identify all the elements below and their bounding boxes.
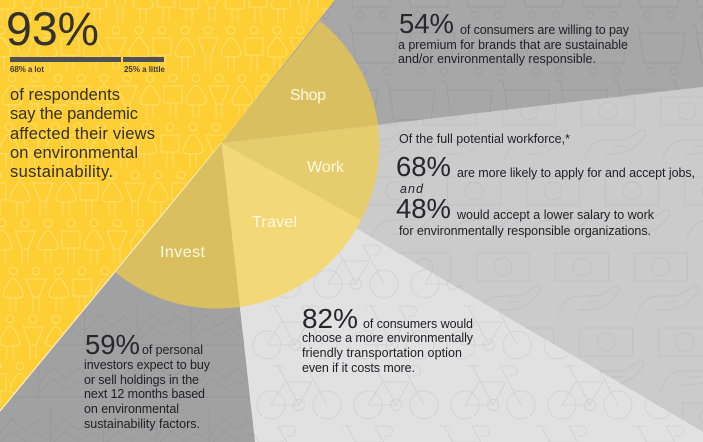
text block: invest statistic: sustainability factors.	[84, 417, 200, 431]
text block: invest statistic: on environmental	[84, 402, 179, 416]
text: respondents statement: affected their views	[10, 125, 155, 143]
text block: work statistics	[396, 132, 695, 238]
bar label: 25% a little: 25% a little	[124, 65, 166, 74]
panel: invest background with line chart pattern	[0, 145, 255, 442]
text block: shop statistic: and/or environmentally responsible.	[398, 52, 596, 66]
bar label: 68% a lot: 68% a lot	[10, 65, 44, 74]
panel: shop background with shopping cart pattern	[222, 0, 703, 143]
text block: travel statistic: friendly transportation option	[302, 346, 462, 360]
text block: work statistics: for environmentally responsible organizations.	[399, 224, 651, 238]
text block: travel statistic: of consumers would	[363, 317, 473, 331]
text block: invest statistic: or sell holdings in the	[84, 373, 199, 387]
label: Travel: Travel	[252, 214, 297, 231]
text block: invest statistic: investors expect to buy	[84, 358, 211, 372]
text block: travel statistic: even if it costs more.	[302, 361, 415, 375]
text block: invest statistic: of personal	[142, 343, 203, 357]
text: respondents statement	[10, 86, 155, 181]
text block: shop statistic: a premium for brands that are sustainable	[398, 38, 628, 52]
text block: travel statistic: choose a more environmentally	[302, 331, 474, 345]
text: respondents statement: of respondents	[10, 86, 120, 104]
text block: work statistics: and	[400, 182, 424, 196]
circle: four category wedges	[116, 21, 379, 309]
text block: work statistics: 68%	[396, 151, 451, 182]
text: respondents statement: say the pandemic	[10, 105, 138, 123]
panel: travel background with bicycle pattern	[238, 228, 703, 442]
text block: work statistics: are more likely to apply for and accept jobs,	[457, 166, 695, 180]
text: respondents statement: sustainability.	[10, 163, 113, 181]
text block: travel statistic: 82%	[302, 303, 358, 334]
panel: yellow respondents area with people pattern	[0, 0, 334, 412]
label: Shop: Shop	[290, 87, 326, 104]
text block: invest statistic: 59%	[85, 329, 140, 360]
panel: work background with money and hand pattern	[224, 87, 703, 432]
text block: shop statistic: of consumers are willing to pay	[460, 23, 630, 37]
bar: 25% a little	[123, 57, 164, 62]
text block: work statistics: 48%	[396, 193, 451, 224]
label: Work: Work	[307, 159, 345, 176]
text block: shop statistic	[398, 8, 630, 66]
text: respondents statement: on environmental	[10, 144, 138, 162]
label: Invest: Invest	[160, 244, 206, 261]
text block: invest statistic: next 12 months based	[84, 387, 205, 401]
bar: 68% a lot	[10, 57, 121, 62]
text block: invest statistic	[84, 329, 211, 431]
text block: shop statistic: 54%	[399, 8, 454, 39]
text block: travel statistic	[302, 303, 474, 375]
stat: 93% headline: 93%	[6, 2, 99, 55]
text block: work statistics: would accept a lower salary to work	[456, 208, 655, 222]
text block: work statistics: Of the full potential workforce,*	[399, 132, 570, 146]
